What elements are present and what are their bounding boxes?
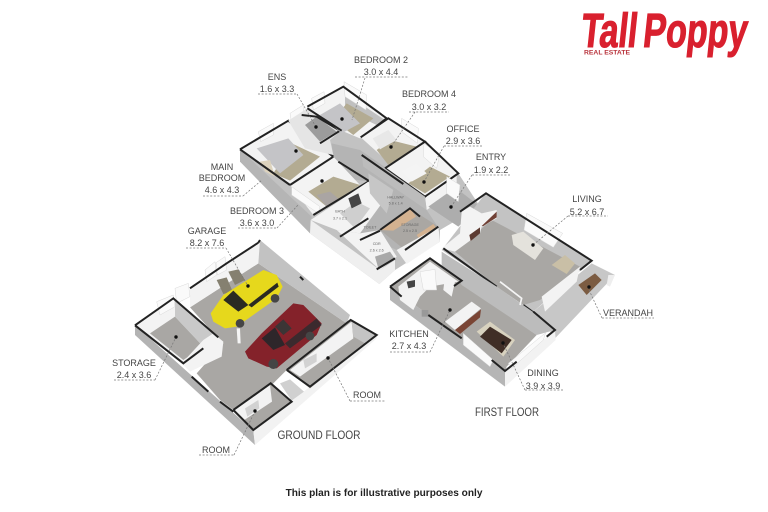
floor plan: first floor living and dining wing — [390, 193, 615, 387]
bedroom 3 — [290, 157, 383, 215]
dining balcony doors — [508, 333, 546, 368]
label: Room bottom: ROOM — [202, 445, 230, 455]
label: Main Bedroom: MAIN — [211, 162, 233, 172]
label: Kitchen: 2.7 x 4.3 — [392, 341, 426, 351]
bottom room — [233, 383, 292, 430]
garage doors and windows — [175, 257, 227, 303]
exterior left and front wall — [240, 149, 312, 233]
garage dark wall outlines — [190, 240, 303, 412]
exterior front wall — [253, 335, 377, 445]
label: Bedroom 2 — [352, 55, 408, 120]
hallway: 5.8 x 1.4 — [389, 201, 403, 205]
stairs — [280, 379, 304, 401]
dining room outline — [390, 258, 555, 371]
storage — [380, 208, 440, 264]
label: Ens: 1.6 x 3.3 — [260, 84, 294, 94]
label: Living — [533, 194, 608, 245]
label: Garage: 8.2 x 7.6 — [190, 238, 224, 248]
label: Ens — [258, 72, 316, 127]
logo: Tall Poppy Real Estate: REAL ESTATE — [584, 50, 631, 56]
dining table — [477, 322, 515, 357]
exterior dining wall right — [505, 330, 556, 387]
label: Verandah — [589, 290, 654, 318]
logo: Tall Poppy Real Estate — [579, 4, 751, 58]
label: Garage: GARAGE — [188, 226, 226, 236]
label: Storage: 2.4 x 3.6 — [117, 370, 151, 380]
room labels — [112, 55, 654, 455]
label: Office: OFFICE — [446, 124, 480, 134]
label: Main Bedroom: BEDROOM — [199, 173, 245, 183]
toilet and corridor — [337, 218, 397, 270]
label: Kitchen — [389, 310, 450, 352]
storage room — [135, 295, 223, 372]
right room — [287, 320, 377, 388]
label: Bedroom 3: BEDROOM 3 — [230, 206, 284, 216]
label: Room right: ROOM — [353, 390, 381, 400]
toilet and corridor: CDR — [373, 242, 381, 246]
label: Entry: 1.9 x 2.2 — [474, 165, 508, 175]
garage rear wall — [190, 243, 260, 307]
bath: 3.7 x 2.1 — [333, 216, 347, 220]
toilet and corridor: TOILET — [364, 225, 377, 229]
car: yellow — [211, 270, 283, 328]
office — [385, 142, 458, 210]
label: Bedroom 4: 3.0 x 3.2 — [412, 102, 446, 112]
label: Bedroom 4 — [391, 89, 456, 147]
heading: ground floor: GROUND FLOOR — [278, 430, 360, 442]
label: Dining: DINING — [527, 368, 559, 378]
label: Living: LIVING — [572, 194, 602, 204]
chairs — [217, 269, 245, 294]
floor plan: ground floor — [135, 240, 377, 445]
label: Entry — [451, 152, 510, 207]
label: Entry: ENTRY — [476, 152, 506, 162]
storage: STORAGE — [401, 223, 419, 227]
label: Verandah: VERANDAH — [603, 308, 653, 318]
car: red — [245, 303, 322, 369]
label: Office — [424, 124, 482, 182]
garage floor — [190, 263, 347, 410]
living room — [442, 193, 592, 317]
wall between living and dining — [442, 252, 555, 335]
label: Bedroom 2: 3.0 x 4.4 — [364, 67, 398, 77]
floor plan: first floor upper wing — [240, 82, 480, 284]
dining windows — [463, 333, 493, 367]
hallway: HALLWAY — [387, 195, 405, 199]
upper wing base silhouette — [240, 87, 480, 284]
heading: first floor: FIRST FLOOR — [475, 407, 539, 419]
label: Living: 5.2 x 6.7 — [570, 207, 604, 217]
exterior dining wall left — [390, 287, 505, 387]
label: Bedroom 4: BEDROOM 4 — [402, 89, 456, 99]
hallway — [368, 173, 405, 213]
label: Main Bedroom — [199, 162, 262, 196]
entry — [427, 177, 480, 227]
kitchen back walls — [398, 262, 458, 317]
label: Bedroom 3: 3.6 x 3.0 — [240, 218, 274, 228]
label: Office: 2.9 x 3.6 — [446, 136, 480, 146]
label: Dining: 3.9 x 3.9 — [526, 381, 560, 391]
main bedroom — [240, 105, 333, 185]
disclaimer: This plan is for illustrative purposes only — [286, 488, 483, 499]
bedroom 2 — [307, 82, 387, 138]
central corridor — [332, 143, 440, 250]
label: Room bottom — [199, 411, 255, 455]
exterior left wall — [135, 325, 255, 445]
label: Bedroom 3 — [230, 205, 298, 228]
lower wing exterior — [310, 220, 395, 284]
kitchen and dining floor — [390, 258, 537, 372]
label: Ens: ENS — [268, 72, 286, 82]
toilet and corridor: 2.6 x 2.6 — [370, 249, 384, 253]
bedroom 4 — [360, 118, 425, 167]
ensuite — [288, 108, 342, 155]
label: Garage — [186, 226, 248, 286]
logo: Tall Poppy Real Estate: Tall — [579, 4, 641, 58]
room marker dots — [174, 117, 591, 413]
label: Main Bedroom: 4.6 x 4.3 — [205, 185, 239, 195]
label: Storage — [112, 337, 176, 380]
label: Dining — [503, 343, 563, 391]
bath: BATH — [335, 210, 345, 214]
label: Bedroom 2: BEDROOM 2 — [354, 55, 408, 65]
label: Storage: STORAGE — [112, 358, 156, 368]
bath — [311, 182, 387, 233]
verandah — [533, 263, 615, 338]
label: Room right — [328, 358, 385, 401]
white rail in living — [500, 282, 522, 305]
storage: 2.5 x 2.5 — [403, 229, 417, 233]
label: Kitchen: KITCHEN — [389, 329, 429, 339]
garage right wall — [258, 240, 350, 323]
wall below bedroom 4 — [362, 155, 427, 210]
logo: Tall Poppy Real Estate: Poppy — [641, 4, 751, 58]
pillar in garage — [237, 328, 241, 343]
kitchen island — [445, 302, 481, 334]
